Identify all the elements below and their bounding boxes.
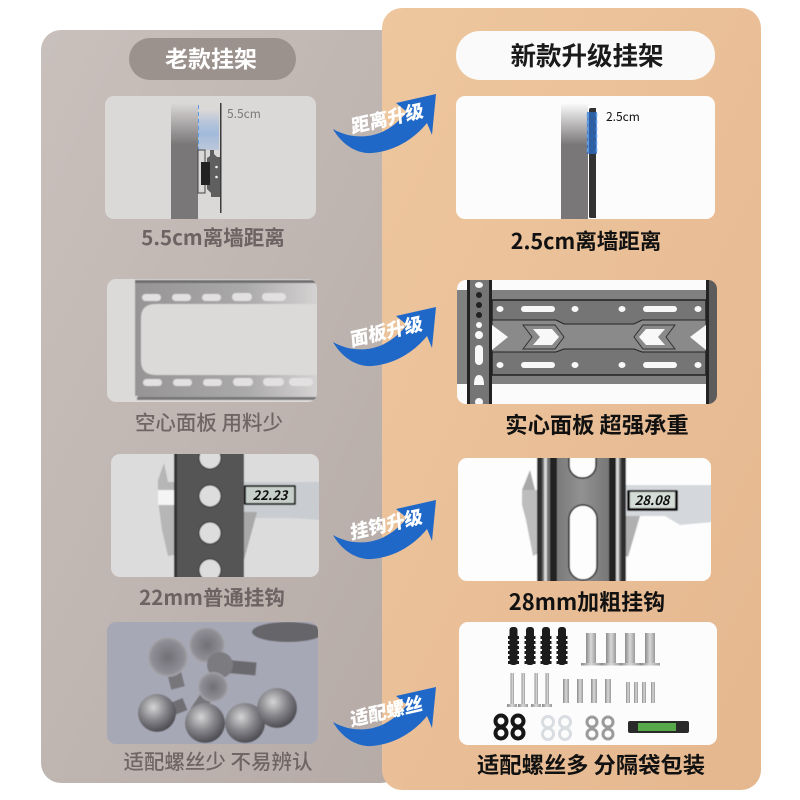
image: new 2.5cm side view: 2.5cm	[606, 108, 640, 125]
caption: 5.5cm: 5.5cm离墙距离	[141, 221, 285, 251]
panel: new bracket	[382, 8, 761, 790]
icon: screws	[507, 673, 655, 707]
caption: hollow panel: 空心面板 用料少	[135, 406, 283, 436]
image: hardware kit	[459, 622, 717, 745]
image: old 22mm hook with caliper	[109, 447, 321, 581]
image: old 5.5cm side view	[105, 96, 316, 219]
image: old 5.5cm side view: 5.5cm	[227, 105, 261, 122]
arrow: screw upgrade	[333, 687, 436, 746]
icon: spirit level	[628, 721, 689, 733]
caption: 22mm: 22mm普通挂钩	[139, 581, 285, 611]
panel: old bracket	[41, 30, 401, 783]
arrow: distance upgrade	[333, 94, 436, 153]
image: old 22mm hook with caliper: 22.23	[253, 485, 289, 504]
heading: new bracket	[456, 31, 715, 80]
caption: 28mm: 28mm加粗挂钩	[509, 585, 665, 617]
image: few screws photo	[105, 620, 324, 746]
image: solid panel	[455, 278, 719, 406]
heading: old bracket: 老款挂架	[165, 40, 257, 74]
arrow: screw upgrade: 适配螺丝	[349, 689, 424, 732]
icon: washers	[496, 716, 613, 740]
image: hollow panel	[105, 277, 319, 404]
heading: old bracket	[129, 38, 296, 80]
caption: 2.5cm: 2.5cm离墙距离	[511, 225, 661, 256]
caption: few screws: 适配螺丝少 不易辨认	[123, 745, 313, 775]
caption: many screws: 适配螺丝多 分隔袋包装	[477, 748, 705, 780]
arrow: panel upgrade	[333, 307, 436, 366]
caption: solid panel: 实心面板 超强承重	[505, 408, 689, 440]
arrow: hook upgrade	[333, 500, 436, 559]
icon: long bolts	[581, 633, 660, 666]
image: new 2.5cm side view	[456, 96, 715, 219]
icon: wall anchors	[510, 627, 566, 665]
arrow: distance upgrade: 距离升级	[350, 96, 425, 139]
heading: new bracket: 新款升级挂架	[510, 36, 664, 73]
arrow: hook upgrade: 挂钩升级	[349, 502, 424, 545]
image: new 28mm hook with caliper: 28.08	[635, 490, 671, 509]
image: new 28mm hook with caliper	[458, 458, 711, 581]
arrow: panel upgrade: 面板升级	[349, 309, 424, 352]
